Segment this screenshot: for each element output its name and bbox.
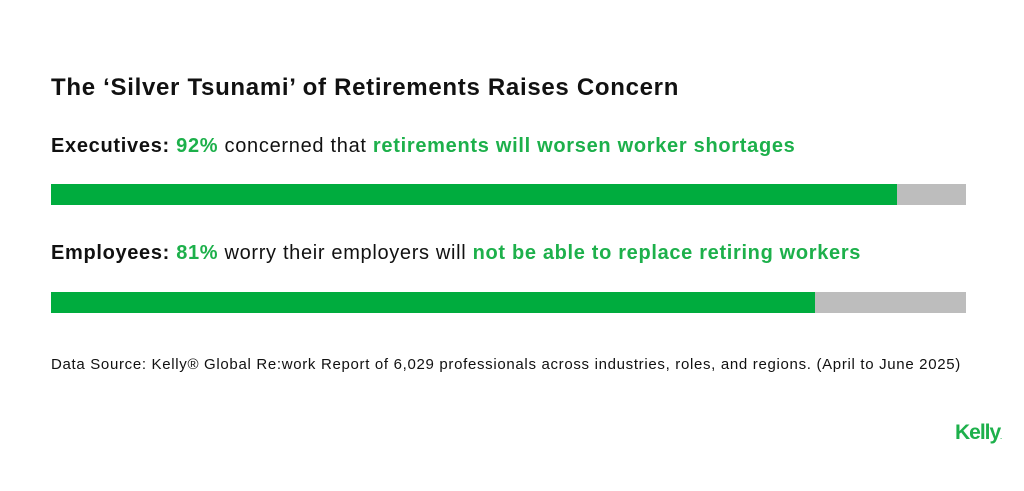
title: The ‘Silver Tsunami’ of Retirements Raises Concern bbox=[51, 74, 679, 101]
logo: Kelly: Kelly. bbox=[955, 421, 1001, 444]
data source: Data Source: Kelly® Global Re:work Report of 6,029 professionals across industries, roles, and regions. (April to June 2025) bbox=[51, 356, 961, 373]
employees statement: Employees: 81% worry their employers will not be able to replace retiring workers bbox=[51, 242, 861, 264]
bar: employees 81% bbox=[51, 292, 966, 313]
bar: executives 92% bbox=[51, 184, 966, 205]
executives statement: Executives: 92% concerned that retirements will worsen worker shortages bbox=[51, 135, 796, 157]
